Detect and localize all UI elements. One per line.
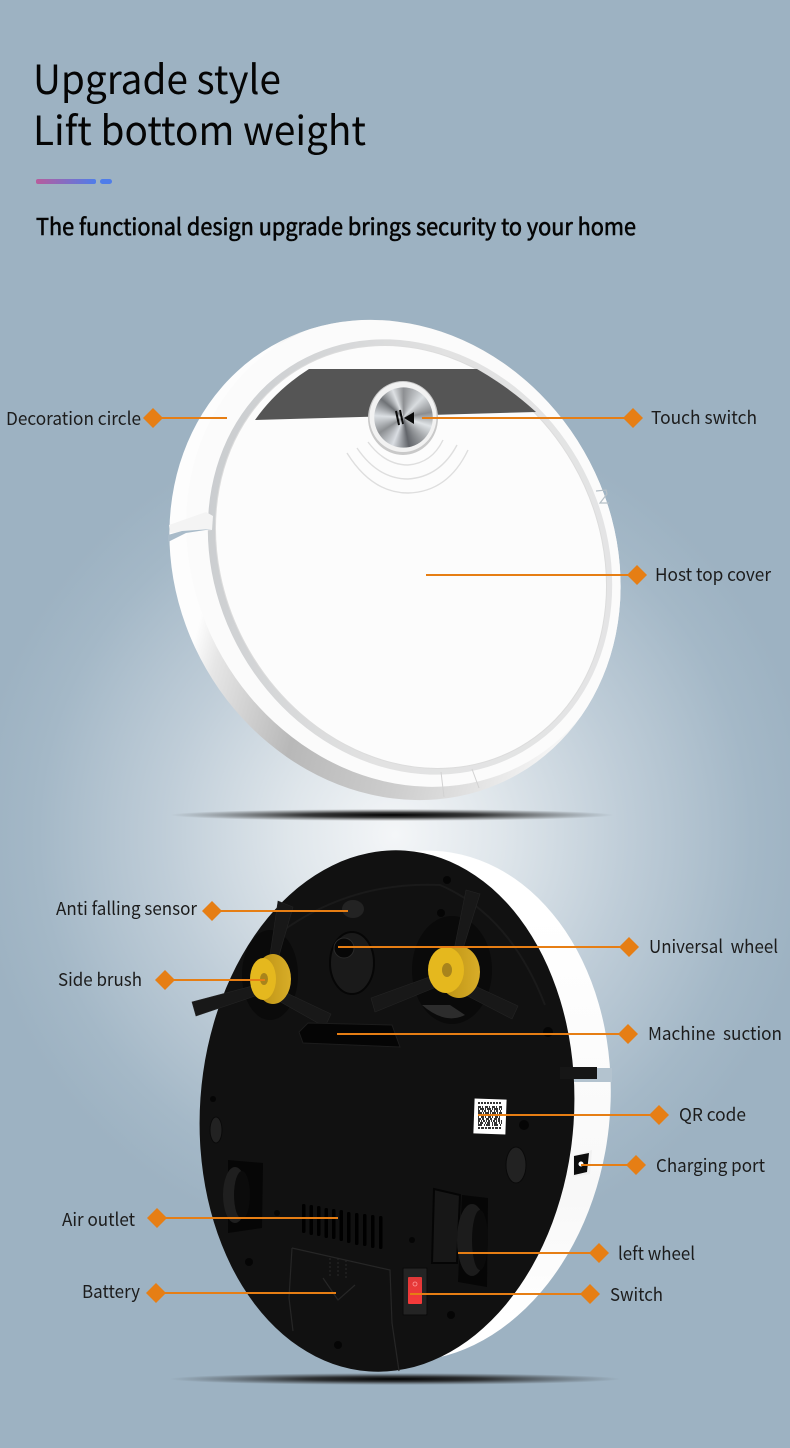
label: Machine suction [337, 1020, 782, 1046]
dark gap block [560, 1067, 597, 1079]
QR code [473, 1098, 507, 1135]
label: Switch: Switch [610, 1281, 663, 1307]
label: QR code [478, 1101, 746, 1127]
left drive wheel bay [223, 1160, 263, 1233]
groove ring [129, 265, 691, 849]
label: Host top cover [426, 561, 772, 587]
side brush recess left [242, 930, 298, 1020]
shadow under bottom robot [169, 1373, 621, 1385]
right drive wheel bay [432, 1189, 488, 1287]
left side brush arms [192, 901, 331, 1027]
power switch [403, 1268, 427, 1315]
shadow under top robot [170, 809, 614, 821]
label: Machine suction: Machine suction [648, 1020, 782, 1046]
anti falling sensor [342, 900, 364, 918]
label: Side brush [58, 966, 265, 992]
dark display band [255, 369, 536, 420]
host cover [140, 274, 682, 840]
universal wheel [330, 932, 374, 994]
charging port [573, 1150, 592, 1177]
label: left wheel: left wheel [618, 1240, 695, 1266]
outer side wall [83, 237, 707, 883]
accent divider [36, 179, 112, 184]
label: Host top cover: Host top cover [655, 561, 772, 587]
label: Anti falling sensor [56, 895, 348, 921]
rear ovals [210, 1117, 526, 1183]
title: Lift bottom weight [33, 99, 366, 157]
right side brush arms [371, 890, 518, 1019]
black underside [182, 838, 592, 1384]
left side brush hub [250, 954, 291, 1004]
label: Charging port: Charging port [656, 1152, 765, 1178]
label: Touch switch: Touch switch [651, 404, 757, 430]
white rim [209, 320, 621, 787]
label: Battery [82, 1278, 336, 1304]
subtitle: The functional design upgrade brings security to your home [36, 208, 636, 242]
gap in side wall [560, 1068, 612, 1082]
right bumper notch [596, 490, 609, 503]
label: left wheel [458, 1240, 695, 1266]
label: Air outlet [62, 1206, 338, 1232]
label: QR code: QR code [679, 1101, 746, 1127]
white side wall [196, 831, 636, 1381]
label: Decoration circle [6, 405, 227, 431]
battery door [289, 1248, 399, 1371]
machine suction [299, 1023, 400, 1047]
title [33, 48, 366, 157]
wave arcs [347, 440, 468, 493]
metal touch button [368, 381, 438, 455]
air outlet vents [302, 1204, 382, 1249]
label: Anti falling sensor: Anti falling sensor [56, 895, 198, 921]
left bumper notch [169, 512, 213, 533]
label: Battery: Battery [82, 1278, 141, 1304]
label: Air outlet: Air outlet [62, 1206, 135, 1232]
robot bottom view [182, 831, 636, 1384]
inner relief line [248, 885, 545, 1005]
label: Universal wheel [338, 933, 778, 959]
screw holes [210, 876, 553, 1349]
robot top view [169, 320, 621, 800]
bottom bumper seam [441, 769, 479, 797]
label: Decoration circle: Decoration circle [6, 405, 141, 431]
right side brush hub [428, 946, 480, 998]
label: Switch [410, 1281, 663, 1307]
label: Side brush: Side brush [58, 966, 142, 992]
label: Universal wheel: Universal wheel [649, 933, 778, 959]
side brush recess right [412, 916, 492, 1024]
label: Touch switch [422, 404, 757, 430]
title: Upgrade style [33, 48, 281, 106]
label: Charging port [581, 1152, 765, 1178]
